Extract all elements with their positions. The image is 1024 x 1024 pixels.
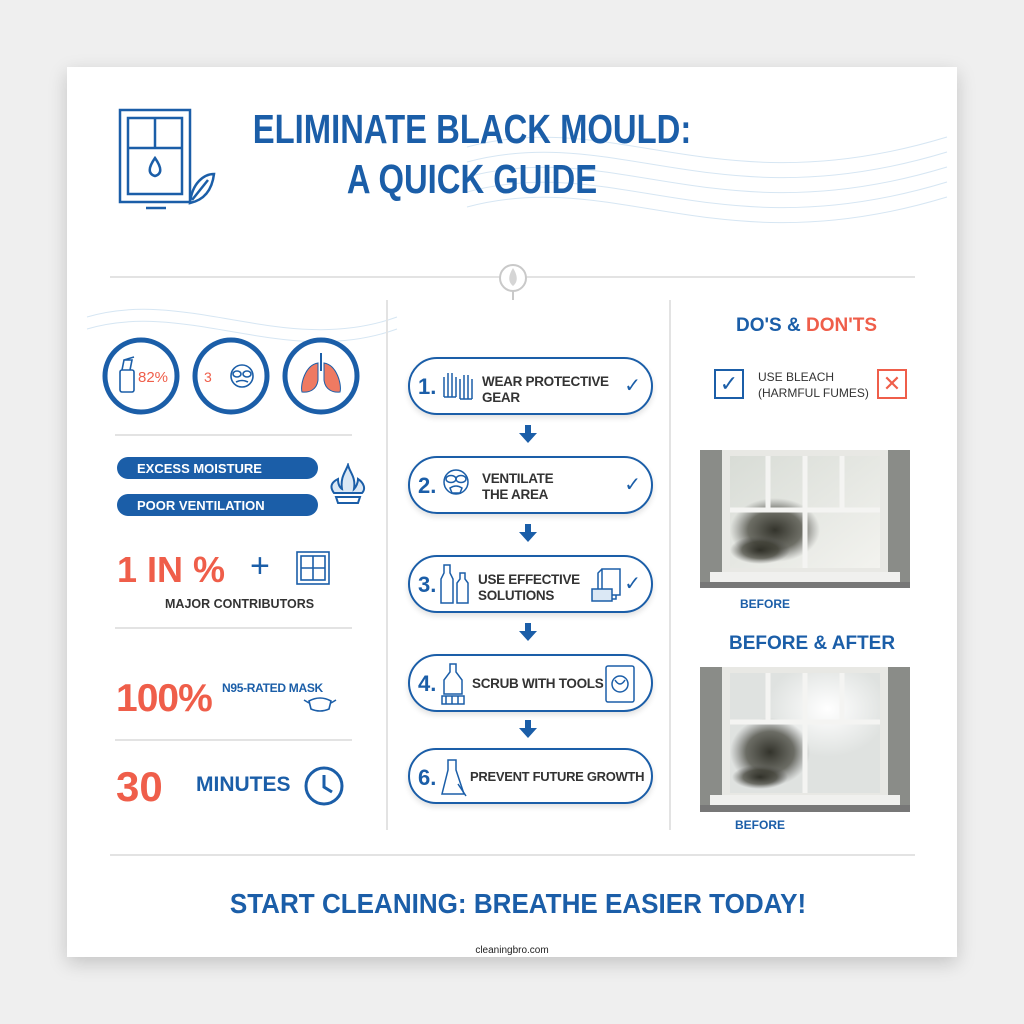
title: A QUICK GUIDE xyxy=(347,156,597,202)
card background xyxy=(67,67,957,957)
step 1: GEAR xyxy=(482,390,520,405)
panel: left stats: MINUTES xyxy=(196,773,290,796)
step 1: ✓ xyxy=(624,375,641,397)
panel: left stats: POOR VENTILATION xyxy=(137,498,265,513)
step 4: 4. xyxy=(418,671,436,696)
x box: ✕ xyxy=(883,371,901,396)
step 3 xyxy=(408,555,653,613)
step 6 xyxy=(408,748,653,804)
stat: 1 in %: 1 IN % xyxy=(117,549,225,590)
panel: right dos & donts xyxy=(700,315,910,832)
step 3: SOLUTIONS xyxy=(478,588,554,603)
step 3: USE EFFECTIVE xyxy=(478,572,580,587)
panel: left stats: N95-RATED MASK xyxy=(222,681,323,695)
stat: 30 minutes: 30 xyxy=(116,763,163,810)
step 3: ✓ xyxy=(624,573,641,595)
arrow xyxy=(519,720,537,738)
step 3: 3. xyxy=(418,572,436,597)
panel: left stats: + xyxy=(250,547,270,585)
step 1 xyxy=(408,357,653,415)
heading: before & after: BEFORE & AFTER xyxy=(729,633,895,654)
panel: steps xyxy=(405,355,657,807)
stat circles xyxy=(102,338,360,414)
step 2: 2. xyxy=(418,473,436,498)
step 2: THE AREA xyxy=(482,487,548,502)
step 6: 6. xyxy=(418,765,436,790)
stat circles: 82% xyxy=(138,369,168,386)
photo: after xyxy=(700,667,910,812)
step 4 xyxy=(408,654,653,712)
heading: DO'S & DON'TS xyxy=(736,315,877,336)
panel: right dos & donts: BEFORE xyxy=(735,818,785,832)
decorative waves xyxy=(87,136,947,342)
arrow xyxy=(519,623,537,641)
arrow xyxy=(519,425,537,443)
stat circles: 3 xyxy=(204,369,212,385)
x box xyxy=(877,369,907,399)
title xyxy=(253,106,691,202)
title: ELIMINATE BLACK MOULD: xyxy=(253,106,691,152)
photo: before xyxy=(700,450,910,588)
cause pills: EXCESS MOISTURE xyxy=(137,461,262,476)
step 6: PREVENT FUTURE GROWTH xyxy=(470,769,644,784)
icon: mould flames xyxy=(330,463,366,504)
step 1: 1. xyxy=(418,374,436,399)
step 2 xyxy=(408,456,653,514)
arrow xyxy=(519,524,537,542)
stat: 100% mask: 100% xyxy=(116,677,212,720)
credit: cleaningbro.com xyxy=(475,945,549,956)
icon: window with leaf xyxy=(118,108,216,210)
panel: left stats xyxy=(102,338,366,810)
step 2: ✓ xyxy=(624,474,641,496)
panel: right dos & donts: USE BLEACH xyxy=(758,370,834,384)
footer callout: START CLEANING: BREATHE EASIER TODAY! xyxy=(230,888,806,919)
step 1: WEAR PROTECTIVE xyxy=(482,374,609,389)
step 2: VENTILATE xyxy=(482,471,553,486)
panel: right dos & donts: BEFORE xyxy=(740,597,790,611)
icon: center emblem xyxy=(499,264,527,300)
panel: left stats: MAJOR CONTRIBUTORS xyxy=(165,597,314,611)
checkbox xyxy=(714,369,744,399)
panel: right dos & donts: (HARMFUL FUMES) xyxy=(758,386,869,400)
cause pills xyxy=(117,457,318,479)
checkbox: ✓ xyxy=(720,371,738,396)
step 4: SCRUB WITH TOOLS xyxy=(472,676,603,691)
divider with center icon xyxy=(110,276,915,278)
